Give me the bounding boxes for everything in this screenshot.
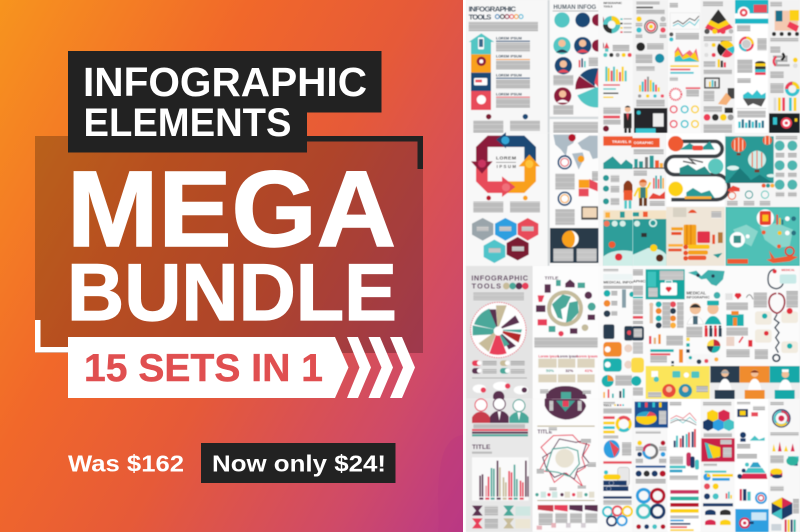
doctor orange panel (740, 366, 770, 399)
speech bubbles (473, 382, 528, 402)
map and medical heading: MEDICAL (686, 290, 706, 295)
white corner bracket (35, 320, 70, 352)
infographic tools heading (471, 274, 529, 291)
tools heading (469, 4, 523, 22)
hex group and red panel (701, 402, 735, 466)
old price: Was $162 (68, 450, 184, 476)
collage tile: travel infographics (631, 133, 800, 266)
stethoscope timeline: MEDICAL (781, 268, 795, 272)
tools heading: TOOLS (469, 13, 491, 22)
line and area charts (669, 3, 700, 127)
dark corner bracket (305, 136, 423, 169)
purple hub (540, 386, 591, 399)
banner: 15 sets in 1: 15 SETS IN 1 (84, 347, 323, 390)
pie chart (575, 67, 598, 107)
travel infographic column: TRAVEL INF (612, 139, 636, 144)
suitcase illustration (666, 207, 725, 266)
people circles (553, 12, 604, 105)
collage tile: people, bars and radar (466, 398, 633, 532)
heading box: infographic elements: ELEMENTS (84, 101, 292, 145)
donut (636, 431, 666, 468)
stacked arrow infographic (469, 33, 494, 110)
collage tile: infographic tools and human infographic: LOREM IPSUM (496, 92, 522, 96)
side column tile (603, 1, 632, 133)
road illustration (665, 133, 729, 206)
circular arrow diagram (471, 132, 540, 197)
yellow panel (646, 366, 710, 399)
collage tile: charts columns (633, 0, 800, 133)
human infographic heading: HUMAN INFOG (553, 5, 597, 11)
title: left: TITLE (472, 444, 491, 451)
hourglass legend (472, 506, 530, 528)
infographic tools heading: TOOLS (472, 282, 501, 291)
tools heading: INFOGRAPHIC (469, 4, 516, 13)
circular arrow diagram: IPSUM (497, 164, 516, 169)
new price box: Now only $24! (212, 450, 386, 476)
traveler figure (623, 180, 633, 209)
line and bar charts (670, 402, 699, 531)
medical left text column (631, 269, 646, 396)
medical left text column: APHIC (633, 279, 646, 284)
body chart (649, 301, 684, 368)
doctor teal panel (770, 366, 800, 399)
collage tile: tools pie and medical (466, 266, 635, 402)
right column charts (603, 402, 632, 526)
background gradient panel (0, 0, 463, 532)
radar chart (537, 427, 596, 491)
title: radar: TITLE (537, 429, 553, 435)
circle row (636, 471, 666, 529)
collage tile: infographic tools and human infographic: LOREM IPSUM (496, 55, 522, 59)
doctors (687, 301, 721, 324)
three business people (472, 398, 529, 423)
collage tile: infographic tools and human infographic (466, 0, 633, 133)
right column charts: TOOLS (603, 405, 612, 407)
banner: 15 sets in 1 (68, 337, 415, 398)
three stat panels: Lorem ipsum (538, 354, 559, 358)
collage tile: lorem arrows and map (466, 132, 636, 266)
people pictograms (705, 325, 722, 337)
three stat panels: 32% (565, 368, 574, 373)
side column tile: TOOLS (603, 4, 613, 8)
travel left column: OGRAPHIC (634, 141, 654, 145)
target and donut column (735, 0, 768, 128)
title: bundle: BUNDLE (67, 248, 397, 338)
markers and text (550, 156, 598, 263)
column one (634, 2, 667, 133)
new price box (201, 443, 396, 483)
concentric and 3D charts (770, 402, 799, 532)
brochure and donut column (769, 2, 800, 133)
pie legend pills (472, 360, 525, 374)
title: mega: MEGA (67, 148, 396, 269)
grouped bar chart (472, 457, 529, 501)
travel infographic column (603, 136, 636, 266)
three stat panels (538, 354, 598, 382)
infographic tools heading: INFOGRAPHIC (471, 274, 529, 283)
collage tile: medical infographic (631, 266, 800, 399)
map and medical heading: INFOGRAPHIC (686, 295, 710, 299)
collage tile: infographic tools and human infographic: LOREM IPSUM (496, 36, 522, 40)
teal world map panel (726, 207, 800, 266)
dark translucent backdrop panel (35, 136, 423, 353)
map and medical heading (686, 270, 725, 299)
doughnut and stripes (703, 471, 733, 525)
travel side column (775, 136, 797, 197)
businessman figure (624, 106, 632, 133)
traveler man (634, 179, 650, 206)
hexagon cluster (472, 218, 538, 263)
radar legend (535, 492, 595, 501)
medical infographic column: MEDICAL INFOG (603, 279, 635, 284)
ribbon cards (537, 505, 598, 530)
three stat panels: 50% (546, 368, 554, 373)
medical kit panel (646, 269, 685, 299)
collage tile: colourful business charts (633, 399, 800, 532)
medical infographic column (602, 269, 635, 398)
heading box: infographic elements: INFOGRAPHIC (83, 59, 367, 105)
medical pie (707, 339, 720, 353)
collage tile: infographic tools and human infographic: LOREM IPSUM (496, 73, 522, 77)
globe diagram: TITLE (545, 275, 559, 281)
travel left column (631, 138, 666, 266)
world map (553, 134, 598, 170)
three stat panels: 41% (585, 368, 593, 373)
pyramid and target (735, 402, 769, 532)
heading box: infographic elements (68, 51, 382, 152)
stethoscope timeline (754, 268, 798, 361)
circular arrow diagram: LOREM (496, 155, 516, 161)
doctor dark panel (710, 366, 740, 399)
purple hub bottom (537, 398, 595, 427)
hospital (725, 293, 753, 357)
side column tile: INFOGRAPHIC (603, 1, 622, 5)
three stat panels: Lorem ipsum (558, 354, 579, 358)
pyramid and pie column (703, 2, 734, 133)
pie on blue panel (635, 402, 668, 428)
three stat panels: Lorem ipsum (577, 354, 598, 358)
globe diagram (536, 275, 596, 336)
balloon panel (725, 136, 776, 205)
large pie chart (471, 302, 526, 358)
collage background (463, 0, 800, 532)
